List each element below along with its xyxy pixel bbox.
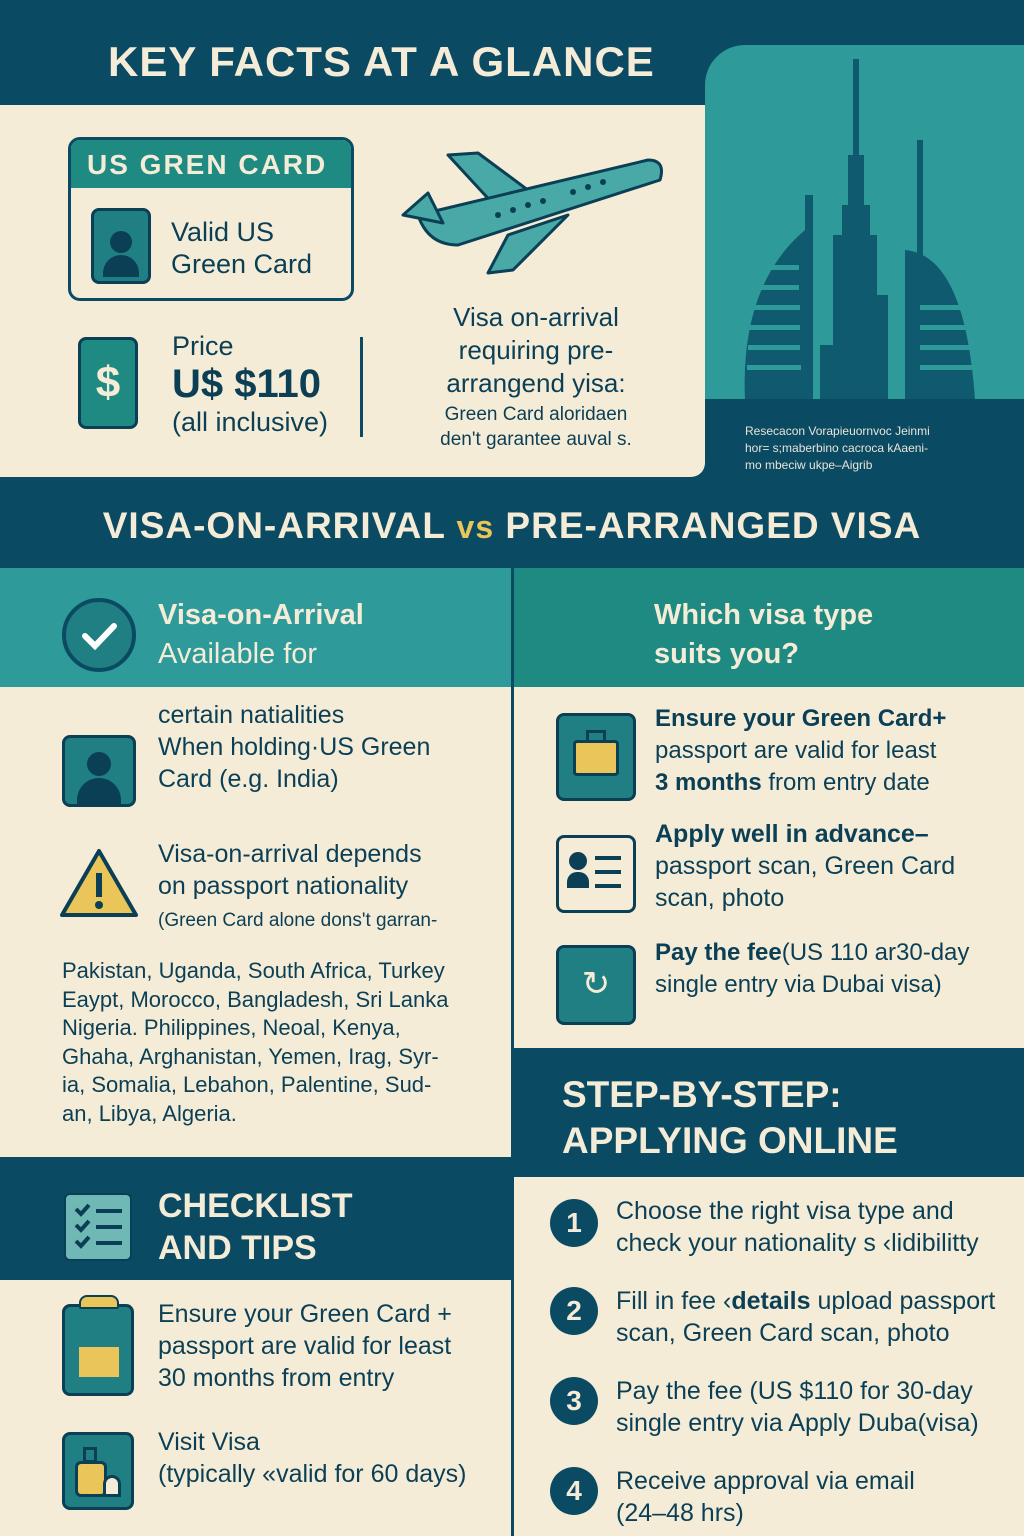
panel: visa-on-arrival: (Green Card alone dons't garran-	[158, 910, 437, 931]
panel: which visa	[514, 568, 1024, 1048]
green card box	[68, 137, 354, 301]
panel: steps: Choose the right visa type and	[616, 1197, 954, 1225]
skyline caption: Resecacon Vorapieuornvoc Jeinmi	[745, 424, 930, 438]
panel: steps: scan, Green Card scan, photo	[616, 1319, 950, 1347]
icon: pay: ↻	[582, 965, 610, 1003]
panel: checklist: (typically «valid for 60 days)	[158, 1460, 466, 1488]
icon: check	[62, 598, 136, 672]
price text: Price	[172, 331, 234, 361]
icon: warning	[60, 848, 138, 917]
nationality list: Nigeria. Philippines, Neoal, Kenya,	[62, 1015, 401, 1040]
icon: dollar	[78, 337, 138, 429]
visa note: Green Card aloridaen	[445, 404, 627, 425]
green card box: Valid US	[171, 217, 274, 247]
nationality list: Ghaha, Arghanistan, Yemen, Irag, Syr-	[62, 1044, 439, 1068]
panel: checklist: Ensure your Green Card +	[158, 1300, 452, 1328]
title: KEY FACTS AT A GLANCE	[108, 38, 655, 85]
visa note: Visa on-arrival requiring pre-arrangend yisa:	[446, 302, 626, 398]
section heading: VISA-ON-ARRIVAL vs PRE-ARRANGED VISA	[103, 505, 921, 546]
panel: steps: 1	[566, 1207, 582, 1238]
panel: visa-on-arrival: Card (e.g. India)	[158, 765, 339, 793]
panel: steps: 2	[566, 1295, 582, 1326]
panel: steps: Receive approval via email	[616, 1467, 915, 1495]
skyline caption: hor= s;maberbino cacroca kAaeni-	[745, 441, 928, 455]
green card box: US GREN CARD	[87, 149, 327, 180]
icon: id card	[91, 208, 151, 284]
step heading: APPLYING ONLINE	[562, 1120, 898, 1161]
price text: U$ $110	[172, 362, 321, 406]
step heading: STEP-BY-STEP:	[562, 1074, 842, 1115]
panel: visa-on-arrival	[0, 568, 511, 1157]
checklist heading: CHECKLIST	[158, 1187, 353, 1225]
panel: visa-on-arrival: Available for	[158, 638, 317, 670]
step heading	[562, 1074, 898, 1161]
nationality list: an, Libya, Algeria.	[62, 1100, 237, 1126]
icon: airplane	[402, 152, 663, 274]
panel: steps	[514, 1177, 1024, 1536]
panel: visa-on-arrival: certain natialities	[158, 701, 344, 729]
icon: checklist	[64, 1193, 132, 1261]
panel: which visa: single entry via Dubai visa)	[655, 971, 942, 998]
icon: luggage	[62, 1432, 134, 1510]
visa note: den't garantee auval s.	[440, 429, 632, 450]
panel: steps: check your nationality s ‹lidibilitty	[616, 1229, 979, 1257]
panel: visa-on-arrival: When holding·US Green	[158, 733, 430, 761]
skyline caption	[745, 424, 930, 472]
panel: which visa: scan, photo	[655, 884, 784, 912]
panel: visa-on-arrival: on passport nationality	[158, 872, 408, 900]
panel: which visa: Which visa type	[654, 599, 873, 631]
checklist heading	[64, 1187, 353, 1267]
skyline caption: mo mbeciw ukpe–Aigrib	[745, 458, 872, 472]
panel: which visa: passport are valid for least	[655, 737, 936, 764]
price text: (all inclusive)	[172, 407, 328, 437]
green card box: Green Card	[171, 249, 312, 279]
panel: which visa: 3 months from entry date	[655, 769, 930, 796]
price text	[172, 331, 328, 437]
nationality list	[62, 958, 448, 1126]
panel: visa-on-arrival: Visa-on-Arrival	[158, 599, 364, 631]
icon: clipboard	[62, 1304, 134, 1396]
panel: which visa: suits you?	[654, 638, 799, 670]
panel: skyline	[705, 45, 1024, 477]
icon: dollar: $	[96, 358, 120, 407]
panel: which visa: Pay the fee(US 110 ar30-day	[655, 939, 969, 966]
icon: id	[556, 835, 636, 913]
nationality list: Pakistan, Uganda, South Africa, Turkey	[62, 958, 445, 983]
panel: checklist: 30 months from entry	[158, 1364, 394, 1392]
nationality list: ia, Somalia, Lebahon, Palentine, Sud-	[62, 1072, 431, 1097]
panel: visa-on-arrival: Visa-on-arrival depends	[158, 840, 422, 868]
panel: steps: single entry via Apply Duba(visa)	[616, 1409, 979, 1437]
panel: steps: Fill in fee ‹details upload passport	[616, 1287, 995, 1315]
panel: key facts	[0, 105, 705, 477]
panel: which visa: Ensure your Green Card+	[655, 705, 946, 732]
icon: suitcase	[556, 713, 636, 801]
panel: checklist: Visit Visa	[158, 1428, 260, 1456]
panel: steps: 3	[566, 1385, 582, 1416]
panel: steps: (24–48 hrs)	[616, 1499, 744, 1527]
panel: steps: Pay the fee (US $110 for 30-day	[616, 1377, 973, 1405]
nationality list: Eaypt, Morocco, Bangladesh, Sri Lanka	[62, 986, 448, 1012]
panel: checklist	[0, 1280, 511, 1536]
icon: person card	[62, 735, 136, 807]
panel: checklist: passport are valid for least	[158, 1332, 451, 1360]
icon: pay	[556, 945, 636, 1025]
visa note	[440, 302, 632, 450]
checklist heading: AND TIPS	[158, 1229, 317, 1267]
panel: which visa: passport scan, Green Card	[655, 852, 955, 880]
panel: steps: 4	[566, 1475, 582, 1506]
panel: which visa: Apply well in advance–	[655, 820, 929, 848]
